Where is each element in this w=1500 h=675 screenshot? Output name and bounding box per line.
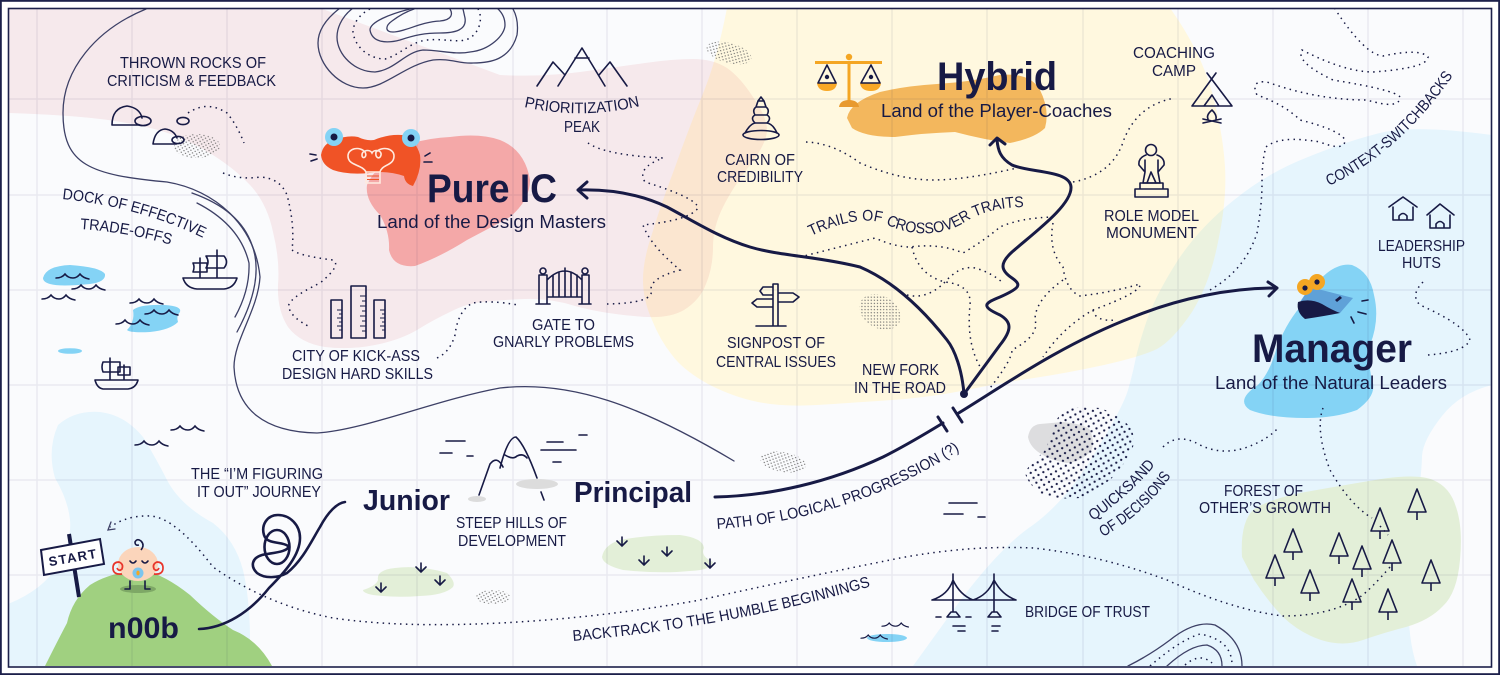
label: prioritization peak: PEAK xyxy=(564,119,601,136)
dotted path: backtrack xyxy=(108,516,1390,625)
quicksand patch xyxy=(1025,407,1134,499)
icon: leadership huts xyxy=(1389,197,1454,228)
icon: small ship xyxy=(95,358,138,389)
heading: Hybrid: Hybrid xyxy=(937,55,1057,99)
label: dock: TRADE-OFFS xyxy=(81,218,172,244)
label: context-switchbacks: CONTEXT-SWITCHBACKS xyxy=(1326,71,1452,184)
label: gate: GATE TO xyxy=(532,317,595,334)
label: role model: MONUMENT xyxy=(1106,225,1198,242)
heading: Hybrid: Land of the Player-Coaches xyxy=(881,101,1112,121)
fork dot xyxy=(960,390,968,398)
icon: tent and campfire xyxy=(1192,73,1232,123)
label: prioritization peak: PRIORITIZATION xyxy=(525,96,639,114)
label: steep hills: DEVELOPMENT xyxy=(458,533,566,550)
label: forest: FOREST OF xyxy=(1224,483,1303,500)
label: role model: ROLE MODEL xyxy=(1104,208,1199,225)
label: bridge: BRIDGE OF TRUST xyxy=(1025,604,1150,621)
heading: Pure IC xyxy=(377,167,606,232)
label: gate: GNARLY PROBLEMS xyxy=(493,334,634,351)
heading: Pure IC: Land of the Design Masters xyxy=(377,212,606,232)
label: logical progression: PATH OF LOGICAL PROGRESSION (?) xyxy=(717,442,959,529)
label: leadership huts: HUTS xyxy=(1402,255,1441,272)
path: fork to pure IC xyxy=(578,182,964,394)
patch: grass junior xyxy=(363,563,454,597)
water pools xyxy=(43,265,907,642)
label: signpost: SIGNPOST OF xyxy=(727,335,825,352)
path: n00b to junior scribble xyxy=(199,502,345,629)
label: trails: TRAILS OF CROSSOVER TRAITS xyxy=(806,196,1024,234)
label: cairn: CREDIBILITY xyxy=(717,169,803,186)
label: coaching camp: COACHING xyxy=(1133,45,1215,62)
label: cairn: CAIRN OF xyxy=(725,152,795,169)
contour lines: bottom xyxy=(1128,624,1242,666)
region: start territory xyxy=(8,412,250,666)
heading: Pure IC: Pure IC xyxy=(427,167,557,211)
label: thrown rocks: THROWN ROCKS OF xyxy=(120,55,266,72)
icon: baby xyxy=(113,540,163,593)
icon: statue xyxy=(1135,144,1168,197)
icon: start sign xyxy=(41,534,104,597)
path: fork to hybrid xyxy=(964,138,1071,394)
blob: pure IC land xyxy=(367,136,530,266)
heading: levels: n00b xyxy=(108,612,179,645)
waves xyxy=(42,274,908,639)
icon: bridge xyxy=(932,574,1016,631)
icon: cairn xyxy=(743,97,779,140)
label: forest: OTHER’S GROWTH xyxy=(1199,500,1331,517)
path: fork to manager xyxy=(953,282,1277,422)
icon: gate xyxy=(536,268,591,304)
blob: manager land xyxy=(1244,265,1376,418)
label: thrown rocks: CRITICISM & FEEDBACK xyxy=(107,73,277,90)
label: dock: DOCK OF EFFECTIVE xyxy=(63,188,207,238)
river coastline xyxy=(63,9,734,461)
blob: hybrid land xyxy=(847,75,1047,143)
icon: mountain peak xyxy=(537,48,627,86)
label: steep hills: STEEP HILLS OF xyxy=(456,515,567,532)
label: city: CITY OF KICK-ASS xyxy=(292,348,420,365)
label: new fork: IN THE ROAD xyxy=(854,380,946,397)
region: manager territory xyxy=(913,129,1492,666)
heading: Manager xyxy=(1215,327,1447,393)
label: coaching camp: CAMP xyxy=(1152,63,1196,80)
label: quicksand: QUICKSAND xyxy=(1089,460,1153,520)
heading: levels: Junior xyxy=(363,485,450,517)
label: figuring it out: IT OUT” JOURNEY xyxy=(197,484,321,501)
label: city: DESIGN HARD SKILLS xyxy=(282,366,433,383)
dotted trails xyxy=(188,9,1470,535)
heading: levels: Principal xyxy=(574,477,692,509)
heading: levels xyxy=(108,477,692,645)
icon: steep hills xyxy=(440,435,587,502)
texture: dot patches xyxy=(174,37,907,604)
label: new fork: NEW FORK xyxy=(862,362,940,379)
icon: signpost xyxy=(752,284,799,326)
forest of trees xyxy=(1266,489,1440,620)
icon: start sign: START xyxy=(47,546,99,569)
path: principal to fork xyxy=(715,417,947,497)
dashes: right of path xyxy=(944,503,985,517)
heading: Hybrid xyxy=(881,55,1112,121)
icon: scales xyxy=(815,54,882,107)
region: forest ground xyxy=(1242,476,1461,644)
icon: whistle with eyes xyxy=(1297,274,1368,323)
label: signpost: CENTRAL ISSUES xyxy=(716,354,836,371)
heading: Manager: Land of the Natural Leaders xyxy=(1215,373,1447,393)
label: leadership huts: LEADERSHIP xyxy=(1378,238,1465,255)
label: quicksand: OF DECISIONS xyxy=(1100,472,1170,536)
hill: n00b xyxy=(45,570,272,666)
icon: large ship xyxy=(183,250,237,289)
heading: Manager: Manager xyxy=(1252,327,1412,371)
region: hybrid territory xyxy=(643,8,1225,406)
label: prioritization peak xyxy=(525,96,639,132)
icon: city of rulers xyxy=(331,286,385,338)
contour lines: top xyxy=(318,8,518,88)
region: pure IC territory xyxy=(8,8,767,348)
label: backtrack: BACKTRACK TO THE HUMBLE BEGINNINGS xyxy=(573,577,870,641)
icon: rocks xyxy=(112,106,189,144)
icon: brain lightbulb with eyes xyxy=(310,128,432,186)
label: figuring it out: THE “I’M FIGURING xyxy=(191,466,323,483)
patch: grass principal xyxy=(602,535,715,572)
